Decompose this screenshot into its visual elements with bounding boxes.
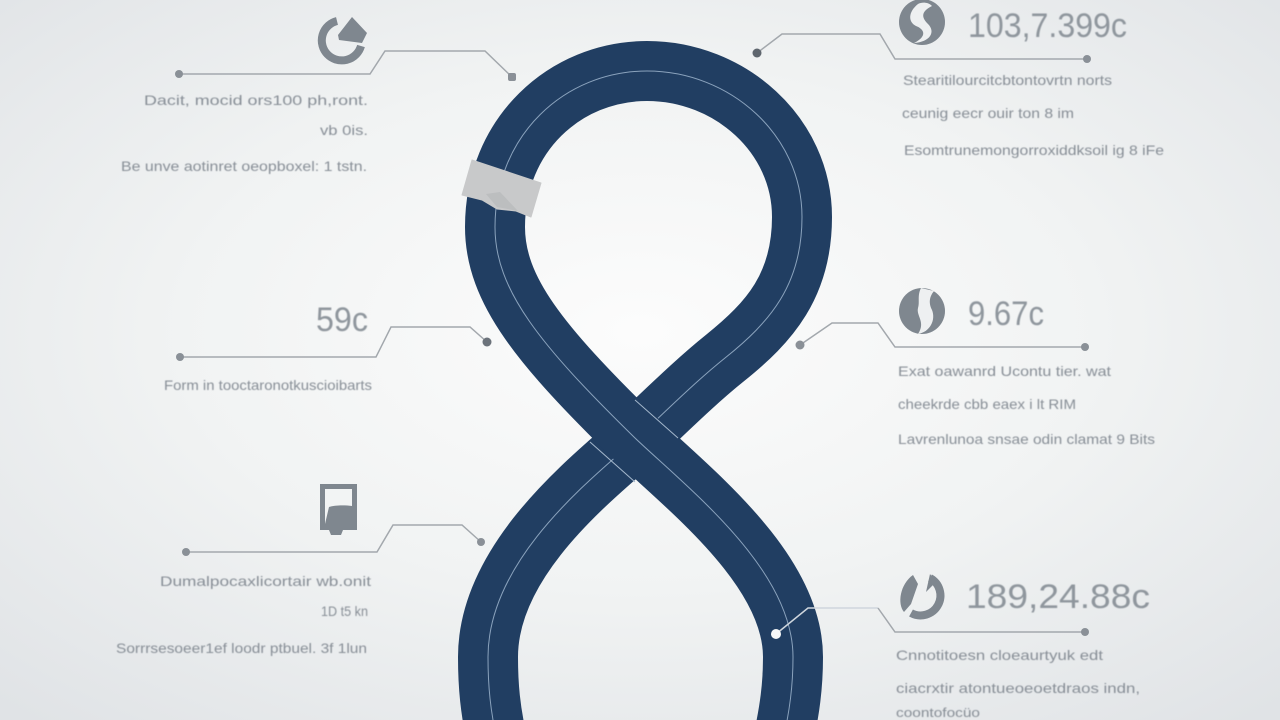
connector line — [175, 51, 516, 81]
figure eight ribbon — [488, 71, 802, 720]
description text: cheekrde cbb eaex i lt RIM — [898, 396, 1076, 412]
description text: coontofocüo — [896, 705, 980, 720]
description text — [898, 363, 1155, 447]
description text — [896, 647, 1140, 720]
description text — [116, 573, 371, 656]
description text: Exat oawanrd Ucontu tier. wat — [898, 363, 1111, 379]
value: 9.67c — [968, 295, 1044, 333]
value: 59c — [316, 301, 368, 339]
value: 189,24.88c — [966, 578, 1150, 616]
callout: bottom right — [771, 574, 1150, 720]
description text: Be unve aotinret oeopboxel: 1 tstn. — [121, 158, 367, 174]
callout: top left — [121, 17, 516, 174]
icon: document square — [320, 484, 357, 535]
description text: 1D t5 kn — [321, 603, 368, 619]
callout: middle left — [164, 301, 492, 393]
description text: ceunig eecr ouir ton 8 im — [902, 105, 1074, 121]
description text: Stearitilourcitcbtontovrtn norts — [903, 72, 1112, 88]
description text — [121, 92, 368, 174]
description text: Dumalpocaxlicortair wb.onit — [160, 573, 371, 589]
description text: Sorrrsesoeer1ef loodr ptbuel. 3f 1lun — [116, 640, 367, 656]
connector line — [771, 608, 1089, 639]
connector line — [796, 323, 1089, 351]
connector line — [752, 34, 1091, 63]
callout: bottom left — [116, 484, 485, 656]
ribbon strand: top left to bottom right — [495, 71, 793, 720]
callout: middle right — [796, 288, 1155, 447]
connector line — [182, 525, 485, 556]
icon: swirl circle — [899, 0, 945, 45]
ribbon strand: top right to bottom left — [488, 71, 802, 720]
icon: broken ring — [900, 574, 940, 615]
description text — [902, 72, 1164, 158]
description text: Cnnotitoesn cloeaurtyuk edt — [896, 647, 1103, 663]
description text: Dacit, mocid ors100 ph,ront. — [144, 92, 368, 108]
icon: crescent circle — [899, 288, 945, 334]
description text: Form in tooctaronotkuscioibarts — [164, 377, 372, 393]
grey tape wrap on ribbon — [462, 160, 541, 217]
description text: Lavrenlunoa snsae odin clamat 9 Bits — [898, 431, 1155, 447]
callout: top right — [752, 0, 1164, 158]
value: 103,7.399c — [968, 7, 1127, 45]
connector line — [176, 327, 492, 361]
description text: Esomtrunemongorroxiddksoil ig 8 iFe — [904, 142, 1164, 158]
description text: ciacrxtir atontueoeoetdraos indn, — [896, 680, 1140, 696]
icon: pie ring — [322, 17, 367, 60]
description text: vb 0is. — [320, 122, 368, 138]
